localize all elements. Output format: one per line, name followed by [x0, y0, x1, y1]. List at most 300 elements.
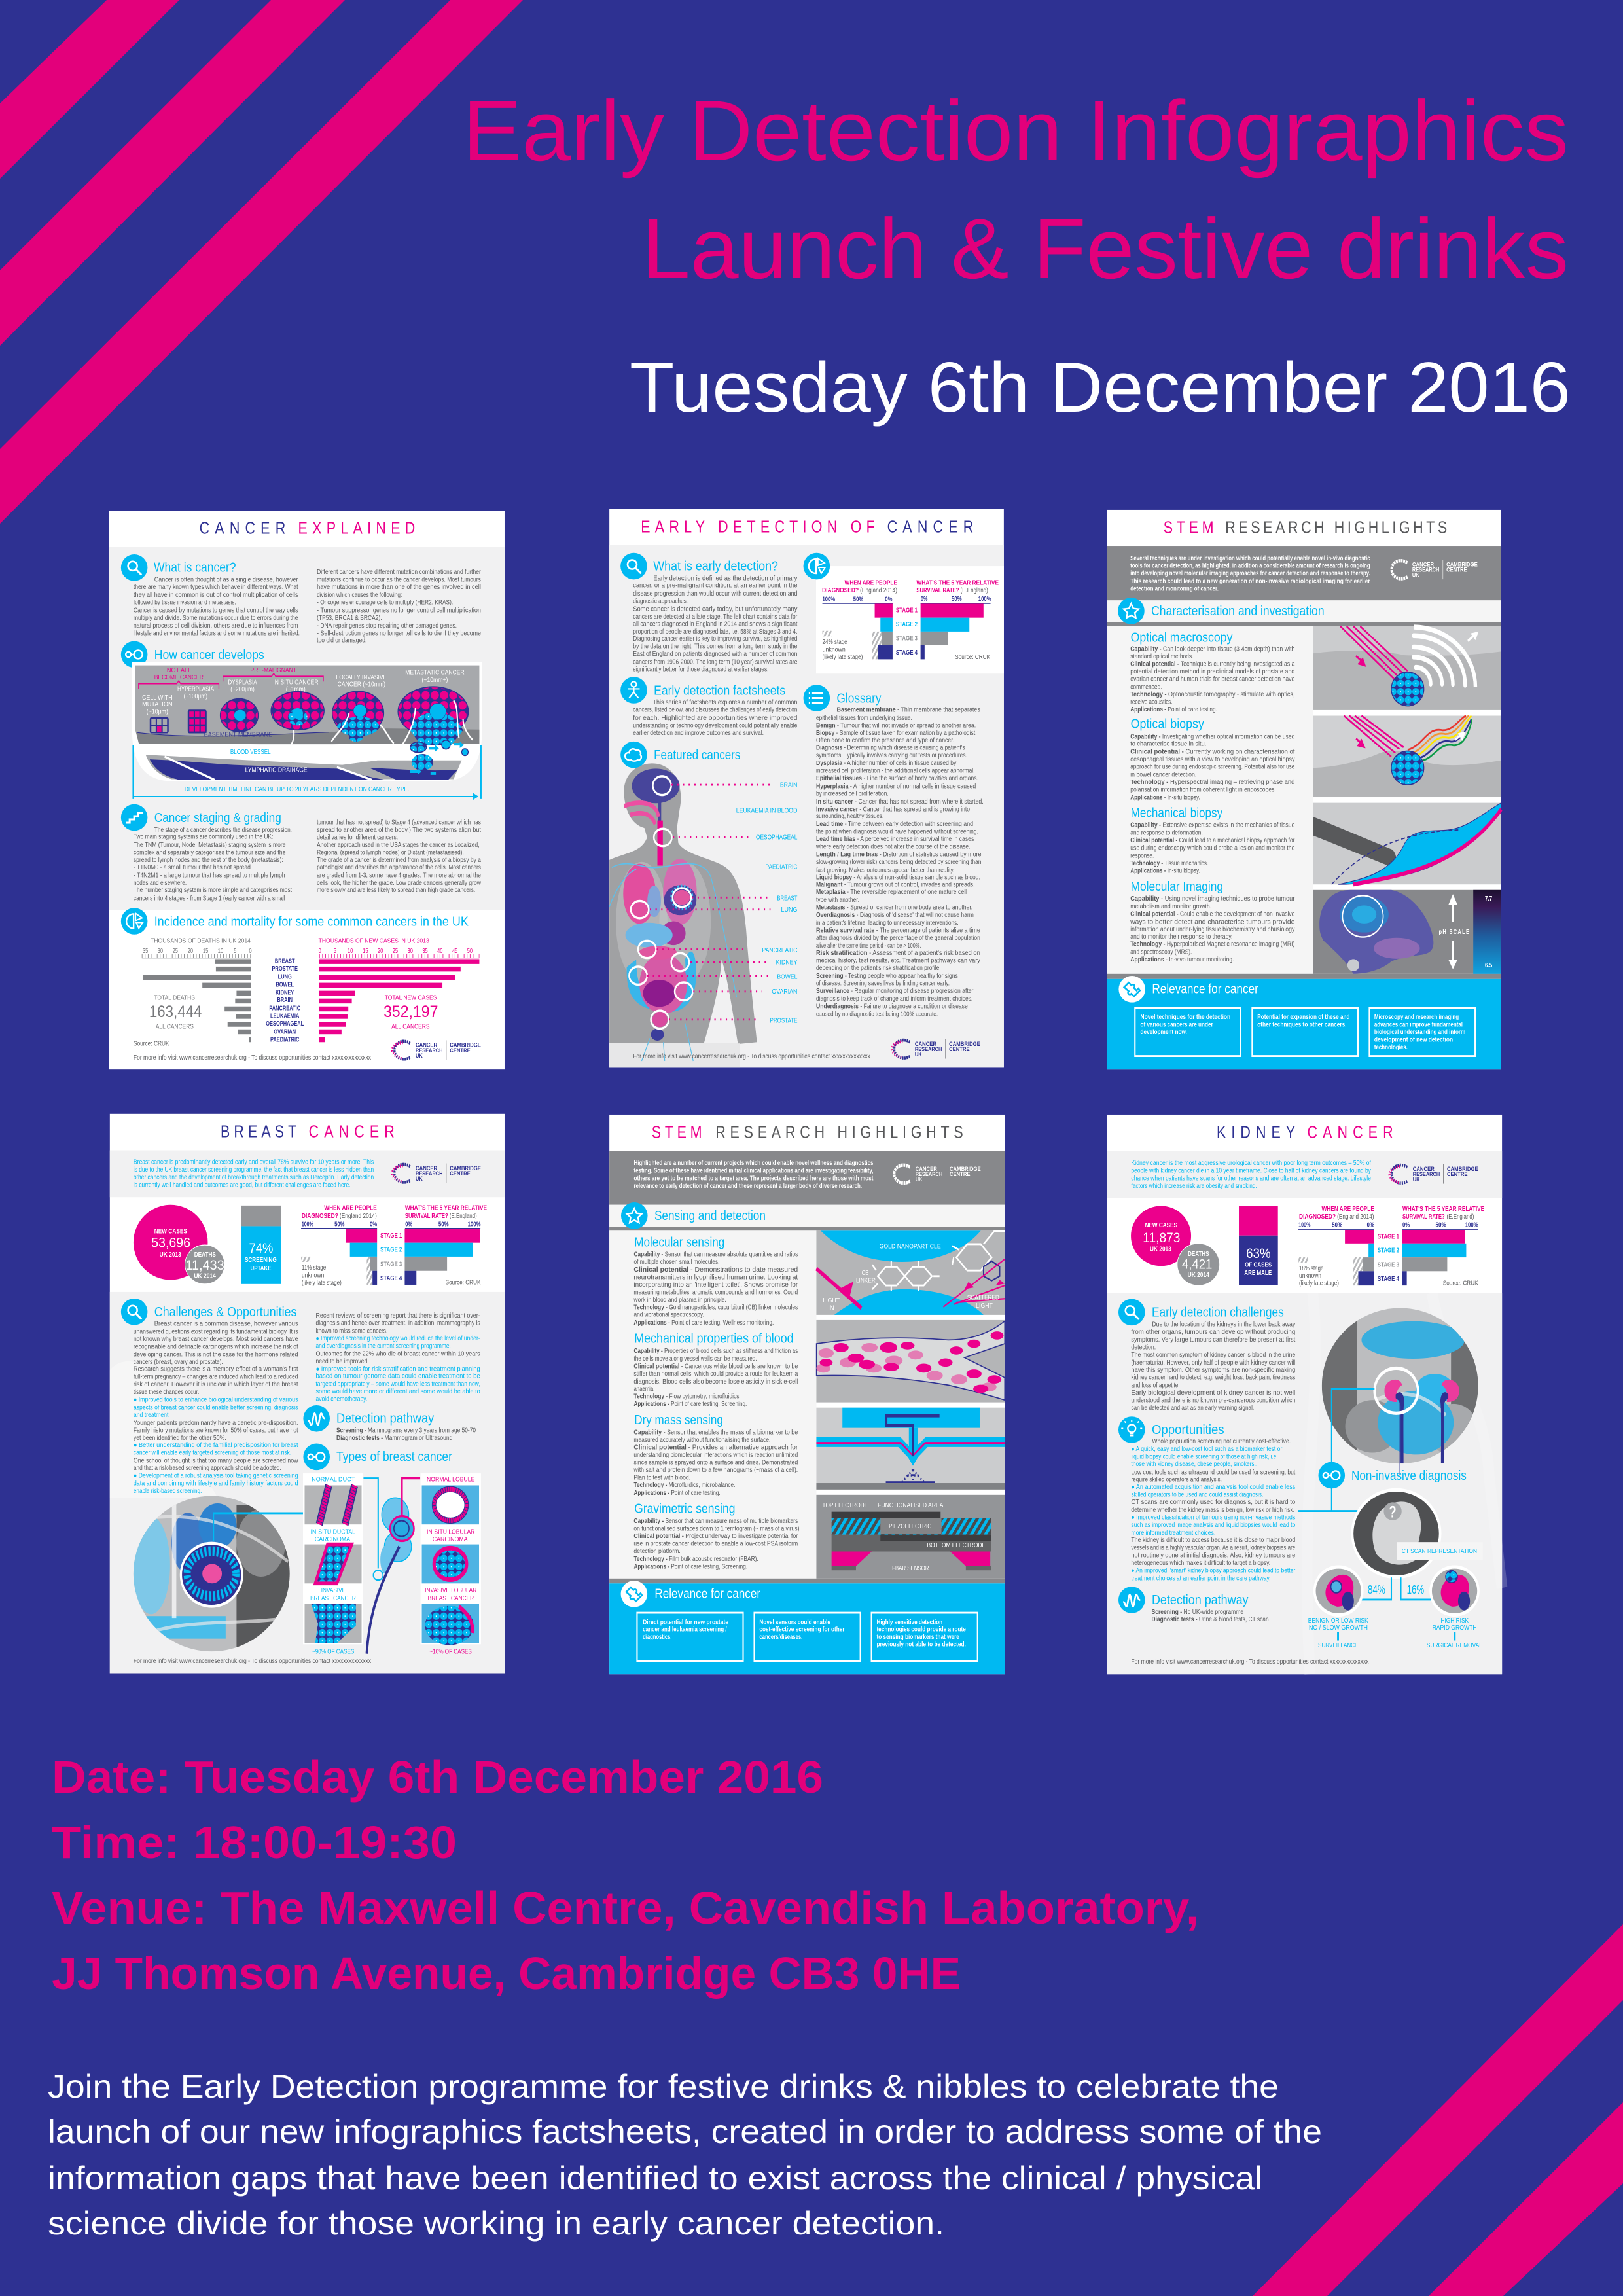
- logo: CANCER: [1413, 1166, 1435, 1172]
- text block: optical macroscopy: Optical macroscopy: [1131, 630, 1233, 645]
- text block: early detection: East of England on patients diagnosed with a number of common: [633, 650, 798, 658]
- text block: gravimetric sensing: on functionalised surfaces down to 1 femtogram (~ mass of a virus).: [633, 1524, 801, 1532]
- logo: [1389, 1164, 1478, 1184]
- text block: early detection: proportion of people are diagnosed late, i.e. 58% at Stages 3 and 4.: [633, 628, 797, 635]
- text block: factsheets: earlier detection and improve outcomes and survival.: [633, 729, 764, 736]
- text block: gravimetric sensing: Applications - Point of care testing, Screening.: [633, 1562, 747, 1570]
- heading: early detection of cancer: EARLY DETECTION OF: [641, 518, 875, 537]
- labels: stages: BASEMENT MEMBRANE: [204, 730, 272, 738]
- text block: intro: detection and monitoring of cancer.: [1130, 584, 1219, 592]
- logo: CENTRE: [949, 1046, 970, 1052]
- chart: stage at diagnosis and survival: (England 2014): [860, 586, 897, 594]
- text block: molecular sensing: Capability - Sensor that can measure absolute quantities and ratios: [633, 1250, 798, 1258]
- text block: glossary: Lead time - Time between early detection with screening and: [816, 820, 973, 828]
- text block: detection pathway: [1152, 1608, 1269, 1623]
- callout boxes: relevance: technologies could provide a route: [876, 1626, 966, 1633]
- text block: intro: into developing novel molecular imaging approaches for cancer detection and response to therapy.: [1130, 569, 1370, 577]
- chart: stage at diagnosis and survival: STAGE 3: [1378, 1261, 1399, 1268]
- stat: male proportion: ARE MALE: [1244, 1269, 1272, 1276]
- illustration: nanoparticle sensing: SCATTERED: [967, 1293, 999, 1301]
- text block: challenges: from other organs, tumours can develop without producing: [1131, 1328, 1295, 1335]
- text block: opportunities: ● An automated acquisition and analysis tool could enable less: [1131, 1483, 1296, 1491]
- text block: intro: others are yet to be matched to a target area. The projects described here are those with most: [633, 1174, 874, 1182]
- text block: intro: Several techniques are under investigation which could potentially enable novel in-vivo diagnostic: [1130, 554, 1370, 562]
- callout boxes: relevance: Highly sensitive detection: [876, 1618, 942, 1626]
- icon: star: [621, 1202, 648, 1229]
- heading: characterisation and investigation: Characterisation and investigation: [1151, 603, 1325, 619]
- heading: breast cancer: CANCER: [309, 1123, 395, 1141]
- logo: CENTRE: [450, 1047, 471, 1054]
- text block: glossary: epithelial tissues from underlying tissue.: [816, 714, 912, 721]
- chart: new cases: 45: [452, 947, 457, 955]
- text block: glossary: Metaplasia - The reversible replacement of one mature cell: [816, 888, 967, 895]
- logo: UK: [916, 1176, 923, 1183]
- text block: molecular imaging: metabolism and monitor growth.: [1130, 903, 1211, 910]
- text block: factsheets: for each. Highlighted are opportunities where improved: [633, 714, 798, 721]
- text block: molecular sensing: measuring metabolites, aromatic compounds and hormones. Could: [633, 1288, 798, 1296]
- labels: stages: (~10μm): [147, 708, 168, 715]
- stat: deaths: 4,421: [1182, 1256, 1212, 1272]
- labels: featured cancers: PAEDIATRIC: [766, 863, 798, 870]
- chart labels: cancer types: PROSTATE: [272, 965, 298, 973]
- text block: staging left: Two main staging systems are commonly used in the UK:: [134, 833, 273, 840]
- labels: stages: MUTATION: [142, 700, 173, 708]
- text block: what is cancer right: have mutations in more than one of the genes involved in cell: [317, 583, 481, 590]
- labels: stages: LYMPHATIC DRAINAGE: [245, 766, 308, 774]
- chart: stage at diagnosis and survival: (E.England): [961, 586, 988, 594]
- text block: glossary: Diagnosis - Determining which disease is causing a patient's: [816, 744, 965, 751]
- text block: gravimetric sensing: Gravimetric sensing: [634, 1501, 735, 1516]
- text block: mechanical properties of blood: stiffer than normal cells, which could provide a route for leukaemia: [633, 1370, 798, 1377]
- chart: stage at diagnosis and survival: Source: CRUK: [446, 1278, 481, 1286]
- text block: staging left: nodes and elsewhere.: [134, 879, 187, 886]
- text block: optical macroscopy: Applications - Point of care testing.: [1130, 706, 1217, 713]
- labels: featured cancers: LEUKAEMIA IN BLOOD: [736, 806, 798, 814]
- labels: stages: LOCALLY INVASIVE: [336, 673, 387, 681]
- chart: deaths: 15: [203, 947, 208, 955]
- chart: deaths: 10: [218, 947, 223, 955]
- text block: challenges: [1131, 1321, 1296, 1411]
- chart: new cases: [319, 937, 479, 1042]
- stat: deaths: [185, 1245, 224, 1284]
- heading: how cancer develops: How cancer develops: [154, 647, 264, 662]
- chart: deaths: 0: [249, 947, 252, 955]
- text block: staging right: detail varies for different cancers.: [317, 833, 398, 841]
- text block: optical biopsy: [1130, 716, 1295, 801]
- illustration: nanoparticle sensing: LINKER: [856, 1276, 876, 1284]
- text block: what is cancer right: division which causes the following:: [317, 591, 402, 598]
- text block: dry mass sensing: Capability - Sensor that enables the mass of a biomarker to be: [633, 1428, 798, 1436]
- text block: molecular imaging: Molecular Imaging: [1131, 879, 1223, 894]
- text block: staging right: pathologist and describes the appearance of the cells. Most cancers: [317, 863, 481, 871]
- text block: glossary: caused by no diagnostic test being 100% accurate.: [816, 1010, 938, 1018]
- text block: challenges left: Family history mutations are known for 50% of cases, but have not: [134, 1426, 298, 1434]
- text block: optical macroscopy: ovarian cancer and human trials for breast cancer detection have: [1130, 675, 1295, 683]
- chart: stage at diagnosis and survival: unknown: [823, 645, 846, 653]
- callout boxes: relevance: development now.: [1141, 1028, 1187, 1036]
- chart: new cases: 5: [334, 947, 336, 955]
- logo: UK: [1413, 1176, 1420, 1183]
- illustration: molecular imaging and pH scale: 6.5: [1485, 961, 1492, 969]
- text block: optical macroscopy: standard optical methods.: [1130, 653, 1193, 660]
- icon: link: [303, 1444, 330, 1470]
- text block: glossary: Overdiagnosis - Diagnosis of 'disease' that will not cause harm: [816, 911, 974, 918]
- text block: molecular sensing: [633, 1234, 798, 1326]
- text block: staging right: more slowly and are less likely to spread than high grade cancers.: [317, 886, 475, 894]
- text block: glossary: Length / Lag time bias - Distortion of statistics caused by more: [816, 851, 982, 858]
- heading: breast cancer: [221, 1123, 395, 1141]
- text block: staging right: tumour that has not spread) to Stage 4 (advanced cancer which has: [317, 818, 481, 826]
- footer: For more info visit www.cancerresearchuk.org - To discuss opportunities contact xxxxxxxxxxxxxx: [134, 1657, 372, 1664]
- text block: opportunities: ● An improved, 'smart' kidney biopsy approach could lead to better: [1131, 1566, 1295, 1574]
- logo: CENTRE: [1447, 1171, 1468, 1177]
- text block: optical biopsy: Optical biopsy: [1131, 716, 1204, 731]
- stat: screening uptake: 74%: [249, 1240, 273, 1256]
- text block: molecular imaging: Clinical potential - Could enable the development of non-invasive: [1130, 910, 1295, 918]
- chart labels: cancer types: LUNG: [278, 973, 292, 980]
- text block: glossary: Malignant - Tumour grows out of control, invades and spreads.: [816, 880, 975, 888]
- text block: mechanical properties of blood: Mechanical properties of blood: [634, 1331, 794, 1346]
- text block: early detection: all cancers diagnosed in England in 2014 and shows a significant: [633, 620, 798, 628]
- heading: stem research highlights: STEM: [652, 1124, 702, 1142]
- chart: new cases: THOUSANDS OF NEW CASES IN UK 2013: [319, 937, 429, 944]
- chart: deaths: ALL CANCERS: [156, 1022, 194, 1030]
- panel: lobule types: BREAST CANCER: [428, 1594, 474, 1602]
- icon: wave: [303, 1405, 330, 1432]
- panel: stem research highlights sensing: [609, 1115, 1005, 1674]
- chart: stage at diagnosis and survival: 0%: [370, 1220, 377, 1228]
- text block: staging left: - T4N2M1 - a large tumour that has spread to multiple lymph: [134, 871, 285, 879]
- text block: optical biopsy: Technology - Hyperspectral imaging – retrieving phase and: [1130, 778, 1295, 785]
- text block: detection pathway: Diagnostic tests - Urine & blood tests, CT scan: [1152, 1615, 1269, 1623]
- illustration: molecular imaging and pH scale: pH SCALE: [1439, 928, 1469, 935]
- text block: opportunities: more informed treatment choices.: [1131, 1529, 1215, 1537]
- chart: stage at diagnosis and survival: 0%: [405, 1220, 412, 1228]
- chart: stage at diagnosis and survival: unknown: [1299, 1272, 1321, 1279]
- text block: optical biopsy: polarisation information from coherent light in endoscopes.: [1130, 785, 1276, 793]
- chart: stage at diagnosis and survival: Source: CRUK: [955, 653, 990, 660]
- chart: new cases: TOTAL NEW CASES: [385, 994, 437, 1001]
- heading: what is cancer: What is cancer?: [154, 560, 236, 575]
- text block: glossary: [815, 706, 984, 1018]
- chart: stage at diagnosis and survival: STAGE 4: [380, 1274, 402, 1282]
- text block: dry mass sensing: with salt and protein down to a few nanograms (~mass of a cell).: [633, 1466, 798, 1473]
- text block: dry mass sensing: [633, 1412, 798, 1496]
- chart: new cases: 40: [437, 947, 442, 955]
- chart: stage at diagnosis and survival: 50%: [853, 595, 863, 603]
- text block: early detection: significantly better for those diagnosed at earlier stages.: [633, 666, 768, 673]
- heading: challenges: Challenges & Opportunities: [154, 1304, 297, 1319]
- text block: intro: Highlighted are a number of current projects which could enable novel wellness and diagnostics: [633, 1159, 874, 1166]
- text block: staging right: [317, 818, 482, 894]
- text block: challenges left: One school of thought is that too many people are screened now: [134, 1456, 298, 1464]
- chart: new cases: 25: [393, 947, 398, 955]
- icon: list: [804, 685, 830, 711]
- text block: optical biopsy: Applications - In-situ biopsy.: [1130, 793, 1200, 801]
- text block: mechanical biopsy: [1130, 805, 1295, 874]
- text block: early detection: [633, 574, 798, 673]
- text block: opportunities: determine whether the kidney mass is benign, low risk or high risk.: [1131, 1506, 1294, 1514]
- chart: deaths: Source: CRUK: [134, 1039, 169, 1047]
- illustration: gravimetric sensor: FBAR SENSOR: [892, 1564, 929, 1571]
- text block: molecular imaging: [1130, 879, 1295, 963]
- stat: deaths: UK 2014: [1188, 1271, 1209, 1278]
- text block: molecular imaging: ways to better detect and characterise tumours provide: [1130, 918, 1295, 925]
- icon: puzzle: [1118, 976, 1145, 1003]
- text block: mechanical biopsy: Technology - Tissue mechanics.: [1130, 859, 1208, 867]
- labels: stages: (~10mm+): [422, 676, 448, 683]
- chart: stage at diagnosis and survival: STAGE 4: [1378, 1275, 1399, 1283]
- logo: CANCER: [916, 1166, 937, 1172]
- text block: molecular imaging: Capability - Using novel imaging techniques to probe tumour: [1130, 895, 1295, 902]
- logo: CANCER: [416, 1165, 437, 1172]
- callout boxes: relevance: previously not able to be detected.: [876, 1641, 966, 1648]
- chart: deaths: 163,444: [149, 1002, 202, 1021]
- text block: detection pathway: Diagnostic tests - Mammogram or Ultrasound: [336, 1434, 453, 1441]
- chart: stage at diagnosis and survival: STAGE 2: [896, 620, 918, 628]
- heading: relevance for cancer: Relevance for cancer: [1152, 981, 1258, 996]
- text block: glossary: Biopsy - Sample of tissue taken for examination by a pathologist.: [816, 729, 976, 736]
- callout boxes: relevance: of various cancers are under: [1141, 1021, 1213, 1028]
- icon: pie: [804, 553, 830, 579]
- text block: challenges: and loss of appetite.: [1131, 1381, 1180, 1389]
- illustration: gravimetric sensor: BOTTOM ELECTRODE: [927, 1541, 986, 1549]
- text block: challenges: (haematuria). However, only half of people with kidney cancer will: [1131, 1359, 1295, 1367]
- icon: search: [121, 554, 147, 581]
- text block: challenges right: avoid chemotherapy.: [315, 1395, 367, 1403]
- chart labels: cancer types: BOWEL: [276, 980, 294, 988]
- text block: what is cancer left: lifestyle and environmental factors and some mutations are inherited.: [134, 629, 300, 637]
- callout boxes: relevance: biological understanding and inform: [1374, 1028, 1465, 1036]
- text block: staging right: Another approach used in the USA stages the cancer as Localized,: [317, 841, 479, 848]
- text block: mechanical properties of blood: Applications - Point of care testing, Screening.: [633, 1400, 747, 1407]
- illustration: nanoparticle sensing: CB: [862, 1269, 868, 1276]
- text block: optical macroscopy: receive acoustics.: [1130, 698, 1172, 706]
- chart: stage at diagnosis and survival: 0%: [1402, 1221, 1410, 1229]
- text block: challenges left: not known why breast cancer develops. Most solid cancers have: [134, 1335, 298, 1342]
- illustration: nanoparticle sensing: LIGHT: [976, 1302, 993, 1309]
- chart: stage at diagnosis and survival: 50%: [1436, 1221, 1446, 1229]
- logo: CAMBRIDGE: [1447, 1166, 1478, 1172]
- text block: challenges right: and overdiagnosis in the current screening programme.: [315, 1342, 451, 1350]
- illustration: CT scan: [1352, 1490, 1483, 1600]
- text block: challenges left: and that a risk-based screening approach should be adopted.: [134, 1464, 281, 1471]
- text block: molecular imaging: Technology - Hyperpolarised Magnetic resonance imaging (MRI): [1130, 940, 1294, 948]
- title: [463, 82, 1569, 296]
- logo: [892, 1039, 980, 1059]
- text block: opportunities: liquid biopsy could enable screening of those at high risk, i.e.: [1131, 1453, 1278, 1460]
- callout boxes: relevance: Direct potential for new prostate: [643, 1618, 728, 1626]
- text block: glossary: fast-growing. Makes outcomes appear better than reality.: [816, 866, 954, 874]
- text block: what is cancer left: there are many known types which behave in different ways. What: [134, 583, 298, 590]
- icon: link: [121, 641, 147, 668]
- stat: deaths: UK 2014: [194, 1272, 216, 1280]
- text block: glossary: Liquid biopsy - Analysis of non-solid tissue sample such as blood.: [816, 874, 980, 881]
- heading: opportunities: Opportunities: [1152, 1422, 1224, 1437]
- callout boxes: relevance: Microscopy and research imaging: [1374, 1013, 1459, 1021]
- text block: what is cancer left: followed by tissue invasion and metastasis.: [134, 598, 236, 606]
- illustration: blood cells in vessel: [816, 1320, 1005, 1403]
- text block: opportunities: [1131, 1437, 1296, 1582]
- chart: stage at diagnosis and survival: 50%: [952, 595, 962, 602]
- text block: detection pathway: Screening - No UK-wide programme: [1152, 1608, 1243, 1615]
- chart: new cases: 35: [422, 947, 428, 955]
- labels: featured cancers: PROSTATE: [770, 1016, 797, 1024]
- icon: wave: [1118, 1587, 1145, 1613]
- dotted leader lines: [647, 785, 770, 1020]
- chart: new cases: 20: [378, 947, 383, 955]
- chart labels: cancer types: PANCREATIC: [269, 1004, 300, 1012]
- heading: what is early detection: What is early detection?: [653, 558, 778, 573]
- text block: challenges left: yet been identified for the other 50%.: [134, 1434, 226, 1441]
- logo: CANCER: [915, 1041, 936, 1047]
- chart: stage at diagnosis and survival: WHEN ARE PEOPLE: [1321, 1205, 1374, 1212]
- heading: detection pathway: Detection pathway: [1152, 1592, 1249, 1607]
- logo: CENTRE: [1446, 567, 1467, 573]
- chart: stage at diagnosis and survival: [822, 579, 999, 660]
- labels: stages: DYSPLASIA: [228, 678, 257, 686]
- labels: featured cancers: OVARIAN: [772, 988, 797, 996]
- stat: male proportion: OF CASES: [1245, 1261, 1272, 1268]
- heading: incidence: Incidence and mortality for some common cancers in the UK: [154, 914, 469, 929]
- text block: molecular sensing: Molecular sensing: [634, 1234, 724, 1249]
- chart: stage at diagnosis and survival: DIAGNOSED?: [302, 1212, 338, 1219]
- text block: mechanical properties of blood: [633, 1331, 798, 1407]
- title: Launch & Festive drinks: [642, 200, 1569, 296]
- labels: stages: IN SITU CANCER: [273, 678, 319, 686]
- labels: stages: (~100μm): [184, 692, 207, 700]
- text block: staging left: spread to lymph nodes and the rest of the body (metastasis):: [134, 856, 283, 863]
- text block: mechanical properties of blood: Technology - Flow cytometry, microfluidics.: [633, 1392, 741, 1400]
- text block: what is cancer left: Cancer is caused by mutations to genes that control the way cells: [134, 606, 298, 614]
- chart labels: cancer types: OESOPHAGEAL: [266, 1020, 304, 1027]
- callout boxes: relevance: [637, 1613, 978, 1661]
- text block: challenges left: ● Better understanding of the familial predisposition for breast: [134, 1441, 298, 1448]
- chart labels: cancer types: OVARIAN: [274, 1028, 296, 1035]
- text block: glossary: Relative survival rate - The percentage of patients alive a time: [816, 926, 980, 934]
- logo: UK: [915, 1051, 922, 1058]
- chart: stage at diagnosis and survival: 100%: [1465, 1221, 1478, 1229]
- labels: stages: PRE-MALIGNANT: [251, 666, 297, 673]
- text block: glossary: symptoms. Typically involves carrying out tests or procedures.: [816, 751, 967, 759]
- text block: intro: tools for cancer detection, as highlighted. In addition a considerable amount of research is ongoing: [1130, 562, 1370, 569]
- text block: what is cancer right: too old or damaged.: [317, 636, 366, 644]
- text block: glossary: by increased cell proliferation.: [816, 790, 889, 797]
- chart: new cases: 15: [363, 947, 368, 955]
- chart: stage at diagnosis and survival: (England 2014): [340, 1212, 377, 1219]
- text block: what is cancer left: they all have in common is out of control multiplication of cells: [134, 591, 298, 598]
- text block: intro: testing. Some of these have identified initial clinical applications and are investigating feasibility,: [633, 1166, 873, 1174]
- chart: stage at diagnosis and survival: WHAT'S THE 5 YEAR RELATIVE: [1402, 1205, 1484, 1212]
- text block: staging left: - T1N0M0 - a small tumour that has not spread: [134, 863, 251, 871]
- heading: stem research highlights: RESEARCH HIGHLIGHTS: [715, 1124, 963, 1142]
- text block: early detection: cancer, or a pre-malignant condition, at an earlier point in the: [633, 582, 798, 589]
- chart: new cases: 10: [348, 947, 353, 955]
- text block: dry mass sensing: Technology - Microfluidics, microbalance.: [633, 1481, 735, 1488]
- text block: molecular imaging: and to monitor their response to therapy.: [1130, 933, 1232, 940]
- labels: featured cancers: BREAST: [777, 894, 798, 902]
- icon: search: [121, 1299, 147, 1325]
- callout boxes: relevance: [1135, 1008, 1475, 1056]
- logo: CAMBRIDGE: [950, 1166, 981, 1172]
- illustration: gravimetric sensor: [816, 1495, 1005, 1579]
- text block: challenges: can be detected and act as an early warning signal.: [1131, 1404, 1254, 1411]
- diagram: how cancer develops: [132, 662, 482, 781]
- panel: lobule types: INVASIVE LOBULAR: [425, 1587, 477, 1594]
- text block: mechanical biopsy: Mechanical biopsy: [1131, 805, 1222, 820]
- labels: featured cancers: LUNG: [781, 906, 797, 913]
- logo: RESEARCH: [916, 1171, 942, 1177]
- illustration: CT scan: 16%: [1407, 1583, 1424, 1596]
- callout boxes: relevance: development of new detection: [1374, 1036, 1453, 1043]
- event details: Date: Tuesday 6th December 2016: [52, 1751, 823, 1803]
- logo: CAMBRIDGE: [1446, 562, 1478, 568]
- chart: stage at diagnosis and survival: 50%: [438, 1220, 449, 1228]
- chart: stage at diagnosis and survival: STAGE 4: [896, 649, 918, 656]
- chart: stage at diagnosis and survival: 50%: [1332, 1221, 1342, 1229]
- text block: glossary: alive after the same time period - can be > 100%.: [816, 942, 921, 949]
- chart: new cases: 30: [408, 947, 413, 955]
- heading: detection pathway: Detection pathway: [336, 1410, 434, 1426]
- illustration: gravimetric sensor: PIEZOELECTRIC: [889, 1522, 932, 1530]
- text block: optical macroscopy: [1130, 630, 1295, 713]
- icon: star: [1118, 598, 1145, 624]
- labels: featured cancers: BRAIN: [780, 781, 797, 789]
- text block: mechanical biopsy: Capability - Extensive expertise exists in the mechanics of tissue: [1130, 821, 1295, 829]
- text block: challenges right: some would have more or different and some would be able to: [315, 1388, 480, 1395]
- panel: duct types: INVASIVE: [321, 1587, 346, 1594]
- text block: glossary: Surveillance - Regular monitoring of disease progression after: [816, 987, 974, 994]
- text block: what is cancer right: Different cancers have different mutation combinations and further: [317, 568, 481, 575]
- text block: what is cancer right: - Tumour suppressor genes no longer control cell multiplication: [317, 606, 481, 614]
- text block: glossary: after diagnosis divided by the percentage of the general population: [816, 934, 980, 941]
- arrow: development timeline: [133, 745, 481, 800]
- stat: new cases: 11,873: [1143, 1230, 1180, 1246]
- text block: gravimetric sensing: [633, 1501, 801, 1570]
- chart: stage at diagnosis and survival: [1298, 1205, 1484, 1287]
- chart: stage at diagnosis and survival: SURVIVAL RATE?: [916, 586, 959, 594]
- text block: opportunities: those with kidney disease, obese people, smokers...: [1131, 1460, 1259, 1467]
- panel: lobule types: [420, 1473, 481, 1655]
- text block: staging left: The number staging system is more simple and categorises most: [134, 886, 293, 894]
- chart: stage at diagnosis and survival: SURVIVAL RATE?: [405, 1212, 448, 1219]
- text block: opportunities: vessels and is a highly vascular organ. As a result, kidney biopsies are: [1131, 1543, 1295, 1551]
- illustration: nanoparticle sensing: IN: [828, 1304, 834, 1312]
- title: Early Detection Infographics: [463, 82, 1569, 179]
- stat: screening uptake: [241, 1206, 281, 1284]
- heading: stem research highlights: STEM: [1164, 519, 1214, 537]
- labels: stages: BLOOD VESSEL: [230, 748, 271, 755]
- logo: UK: [1412, 572, 1419, 579]
- chart: stage at diagnosis and survival: 0%: [921, 595, 927, 602]
- chart: stage at diagnosis and survival: STAGE 3: [896, 635, 918, 642]
- text block: molecular sensing: Clinical potential - Demonstrations to date measured: [633, 1266, 798, 1273]
- panel: breast cancer: [110, 1114, 505, 1673]
- text block: detection pathway: [336, 1426, 476, 1441]
- text block: molecular sensing: Applications - Point of care testing, Wellness monitoring.: [633, 1319, 774, 1326]
- text block: molecular sensing: Technology - Gold nanoparticles, cucurbituril (CB) linker molecules: [633, 1303, 798, 1311]
- chart: stage at diagnosis and survival: 100%: [1298, 1221, 1310, 1229]
- panel: early detection of cancer: [609, 509, 1004, 1067]
- text block: glossary: Epithelial tissues - Line the surface of body cavities and organs.: [816, 774, 978, 781]
- icon: puzzle: [621, 1581, 647, 1607]
- heading: cancer explained: EXPLAINED: [298, 520, 415, 538]
- stat: new cases: [134, 1205, 207, 1280]
- text block: challenges: Due to the location of the kidneys in the lower back away: [1152, 1321, 1296, 1328]
- icon: breast detail: [671, 886, 692, 909]
- text block: intro: factors which increase risk are obesity and smoking.: [1131, 1182, 1257, 1189]
- heading: relevance for cancer: Relevance for cancer: [654, 1586, 760, 1601]
